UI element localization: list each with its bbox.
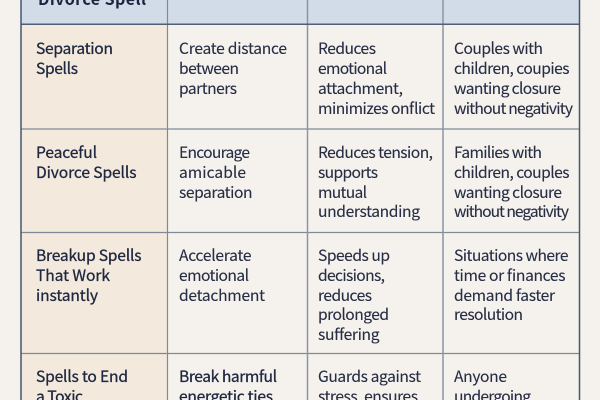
cell: best for: resolution — [454, 303, 523, 325]
cell: name — [36, 141, 136, 183]
cell: purpose: Encourage — [179, 141, 250, 163]
cell: benefits: Guards against — [318, 365, 421, 387]
cell: benefits: understanding — [318, 200, 420, 222]
cell: name: Divorce Spells — [36, 161, 136, 183]
cell: purpose: Create distance — [179, 37, 287, 59]
cell: benefits — [318, 365, 421, 400]
cell: purpose: amicable — [179, 161, 246, 183]
cell: best for: Anyone — [454, 365, 507, 387]
cell: name: Breakup Spells — [36, 244, 142, 266]
cell: benefits: minimizes onflict — [318, 97, 435, 119]
row: separation spells — [36, 37, 573, 119]
cell: purpose: Break harmful — [179, 365, 277, 387]
cell: name: instantly — [36, 284, 98, 306]
cell: best for — [454, 365, 531, 400]
cell: purpose — [179, 141, 252, 203]
cell: purpose — [179, 365, 277, 400]
row: breakup spells that work instantly — [36, 244, 568, 345]
row: spells to end a toxic — [36, 365, 531, 400]
cell: purpose: detachment — [179, 284, 265, 306]
cell: name: Separation — [36, 37, 113, 59]
cell: best for — [454, 141, 570, 222]
cell: name — [36, 37, 113, 79]
cell: benefits — [318, 37, 435, 119]
cell: best for: without negativity — [454, 97, 573, 119]
cell: purpose: partners — [179, 77, 237, 99]
cell: best for: children, couples — [454, 161, 570, 183]
cell: best for: wanting closure — [454, 77, 561, 99]
cell: purpose: Accelerate — [179, 244, 252, 266]
cell: benefits — [318, 244, 390, 345]
cell: purpose — [179, 37, 287, 99]
cell: name: Spells — [36, 57, 78, 79]
cell: name — [36, 244, 142, 306]
cell: best for — [454, 37, 573, 119]
cell: benefits: supports — [318, 161, 378, 183]
cell: best for — [454, 244, 568, 325]
cell: benefits — [318, 141, 433, 222]
cell: best for: demand faster — [454, 284, 556, 306]
cell: benefits: decisions, — [318, 264, 385, 286]
cell: purpose: between — [179, 57, 239, 79]
row: peaceful divorce spells — [36, 141, 570, 222]
cell: name — [36, 365, 128, 400]
cell: benefits: emotional — [318, 57, 387, 79]
cell: name: Peaceful — [36, 141, 97, 163]
cell: best for: Couples with — [454, 37, 543, 59]
cell: name: That Work — [36, 264, 110, 286]
cell: best for: without negativity — [454, 200, 569, 222]
cell: name: Spells to End — [36, 365, 128, 387]
cell: benefits: mutual — [318, 181, 367, 203]
cell: best for: children, coupies — [454, 57, 570, 79]
cell: purpose: separation — [179, 181, 252, 203]
cell: purpose: emotional — [179, 264, 249, 286]
first column shading — [21, 24, 168, 400]
cell: best for: time or finances — [454, 264, 566, 286]
cell: benefits: attachment, — [318, 77, 403, 99]
cell: benefits: Reduces tension, — [318, 141, 433, 163]
cell: best for: wanting closure — [454, 181, 562, 203]
cell: benefits: suffering — [318, 323, 380, 345]
table header band — [21, 0, 580, 24]
cell: benefits: reduces — [318, 284, 372, 306]
cell: purpose — [179, 244, 265, 306]
cell: benefits: Reduces — [318, 37, 376, 59]
cell: best for: Situations where — [454, 244, 568, 266]
cell: benefits: Speeds up — [318, 244, 390, 266]
cell: best for: Families with — [454, 141, 542, 163]
cell: benefits: prolonged — [318, 303, 389, 325]
